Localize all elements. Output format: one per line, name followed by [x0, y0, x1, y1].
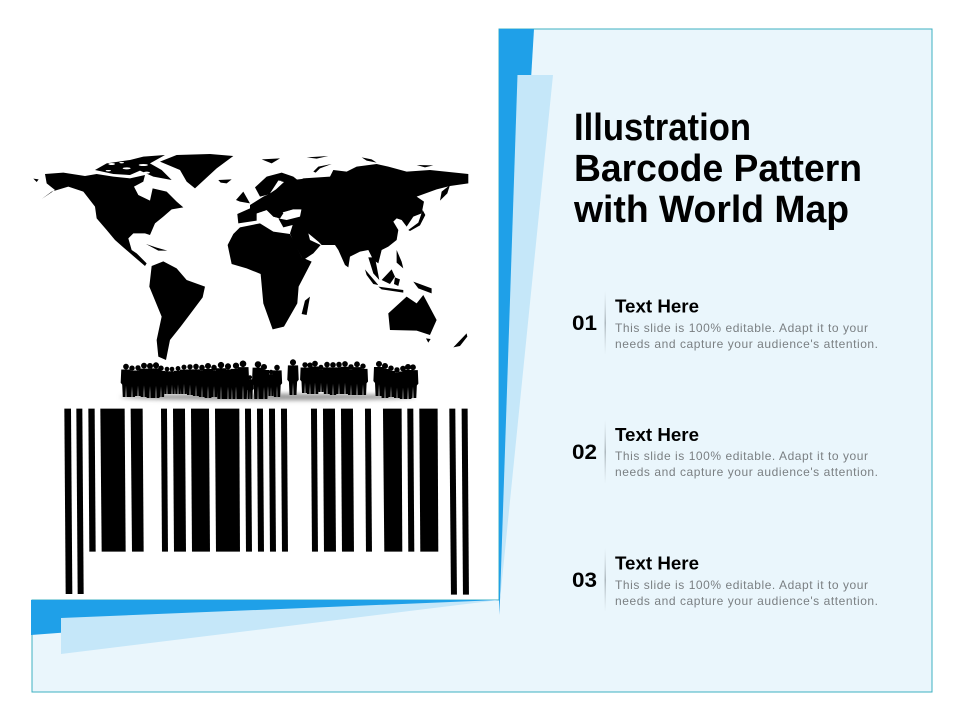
alaska speck	[33, 179, 39, 182]
description 02: This slide is 100% editable. Adapt it to your	[615, 449, 868, 463]
crowd silhouettes	[120, 359, 418, 400]
title: with World Map	[573, 189, 849, 231]
eurasia	[250, 164, 468, 267]
iberia	[237, 203, 257, 223]
shape: top dark blue fold	[499, 29, 534, 615]
item 02	[572, 420, 878, 484]
number 03: 03	[572, 569, 597, 592]
cuba	[146, 244, 167, 251]
canadian arctic islands	[95, 155, 172, 180]
number 02: 02	[572, 441, 597, 464]
description 02	[615, 449, 878, 479]
description 03	[615, 578, 878, 608]
north america	[42, 173, 183, 266]
heading 03: Text Here	[615, 554, 699, 574]
title	[573, 107, 862, 231]
description 01	[615, 321, 878, 351]
divider 01	[604, 291, 606, 355]
item 01	[572, 291, 878, 355]
anatolia	[278, 217, 308, 233]
description 02: needs and capture your audience's attention.	[615, 465, 878, 479]
sakhalin and kamchatka	[440, 185, 450, 201]
description 01: needs and capture your audience's attention.	[615, 337, 878, 351]
shape: bottom light blue fold	[61, 600, 499, 654]
japan	[408, 210, 425, 231]
madagascar	[302, 297, 310, 315]
europe infill	[250, 178, 308, 221]
arctic channels	[106, 162, 150, 174]
iceland	[218, 179, 232, 183]
world map	[33, 154, 468, 360]
divider 03	[604, 548, 606, 612]
southern continents	[149, 223, 467, 360]
title: Illustration	[574, 107, 751, 149]
americas and arctic	[33, 154, 257, 266]
united kingdom	[236, 192, 250, 203]
southeast asia	[368, 257, 379, 280]
black sea	[283, 209, 300, 216]
shape: bottom dark blue fold	[31, 600, 499, 635]
shape: top light blue fold	[500, 75, 553, 600]
item 03	[572, 548, 878, 612]
heading 01: Text Here	[615, 296, 699, 316]
south america	[149, 261, 205, 360]
crowd shadow	[120, 394, 416, 400]
australia	[388, 295, 437, 335]
title: Barcode Pattern	[574, 148, 862, 190]
africa	[228, 223, 312, 329]
greenland	[160, 154, 233, 188]
description 03: needs and capture your audience's attention.	[615, 594, 878, 608]
description 03: This slide is 100% editable. Adapt it to your	[615, 578, 868, 592]
number 01: 01	[572, 312, 597, 335]
arctic specks	[262, 158, 280, 163]
divider 02	[604, 420, 606, 484]
eurasia group	[250, 156, 468, 267]
scandinavia	[255, 173, 298, 197]
description 01: This slide is 100% editable. Adapt it to your	[615, 321, 868, 335]
baltic sea	[270, 181, 284, 193]
barcode	[64, 409, 469, 595]
heading 02: Text Here	[615, 425, 699, 445]
new zealand	[453, 333, 467, 347]
